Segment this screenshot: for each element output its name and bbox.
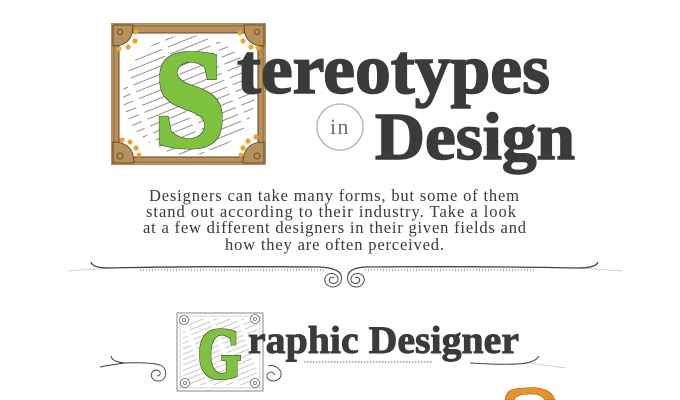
- icon: large S initial frame: [111, 22, 266, 177]
- intro paragraph: [143, 186, 527, 254]
- big letter G: G: [198, 314, 241, 394]
- heading divider with scrolls: [100, 356, 566, 381]
- corner ornaments: [113, 25, 264, 163]
- title: Design: [375, 100, 575, 174]
- scroll left: [325, 274, 341, 287]
- title: [237, 31, 575, 174]
- big letter S: S: [154, 22, 226, 177]
- intro paragraph: Designers can take many forms, but some of them: [149, 186, 519, 205]
- badge: in: in: [330, 114, 350, 139]
- divider with scrolls: [68, 262, 622, 287]
- intro paragraph: how they are often perceived.: [225, 235, 444, 254]
- intro paragraph: stand out according to their industry. Take a look: [146, 202, 517, 221]
- scroll right: [348, 274, 364, 287]
- section heading: Graphic Designer: raphic Designer: [248, 319, 519, 362]
- title: tereotypes: [237, 31, 550, 109]
- badge: in: [317, 104, 363, 150]
- icon: orange top of next illustration: [505, 388, 555, 400]
- icon: small G initial frame: [177, 313, 263, 394]
- intro paragraph: at a few different designers in their given fields and: [143, 218, 527, 237]
